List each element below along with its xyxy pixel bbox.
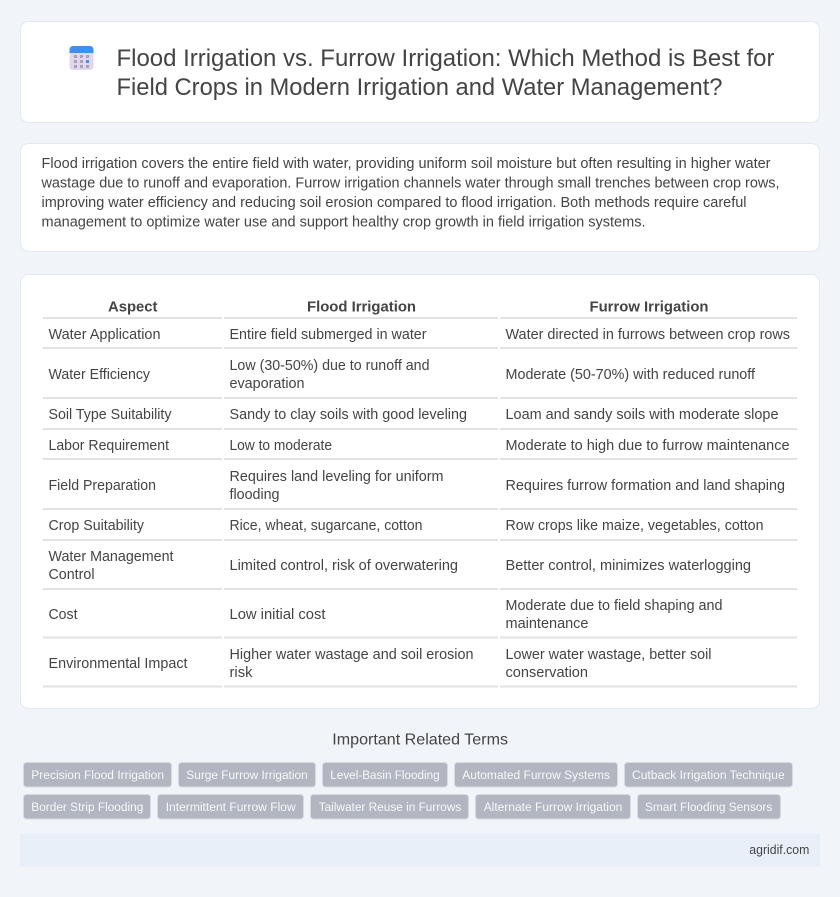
row: environmental impact: conservation [506,665,588,681]
table header row: Furrow Irrigation [590,298,708,316]
row: field preparation: Requires furrow formation and land shaping [506,478,785,494]
panel: title header [20,22,820,122]
related terms tags [24,762,792,819]
intro text block: Flood irrigation covers the entire field with water, providing uniform soil moisture but often resulting in higher water [42,156,771,172]
row: water management control: Water Management [48,549,174,565]
row: water efficiency: evaporation [230,376,304,392]
row: water management control: Better control, minimizes waterlogging [506,558,751,574]
related terms tags: Smart Flooding Sensors [645,800,772,814]
row: cost [43,598,797,638]
row: soil type suitability: Soil Type Suitability [48,407,172,423]
related terms tags: Intermittent Furrow Flow [166,800,296,814]
row: water efficiency: Water Efficiency [48,367,151,383]
row: cost: Cost [48,607,78,623]
row: labor requirement: Moderate to high due to furrow maintenance [506,438,790,454]
related terms tags: Precision Flood Irrigation [31,768,164,782]
title [116,45,774,101]
row: cost: maintenance [506,616,588,632]
row: water management control [43,549,797,590]
related terms tags: Cutback Irrigation Technique [632,768,785,782]
row: cost: Moderate due to field shaping and [506,598,722,614]
row: labor requirement: Low to moderate [230,438,332,454]
title: Flood Irrigation vs. Furrow Irrigation: Which Method is Best for [116,45,774,72]
icon: calendar grid [70,46,94,70]
row: crop suitability: Row crops like maize, vegetables, cotton [506,518,764,534]
related terms tags: Automated Furrow Systems [462,768,610,782]
intro text block: improving water efficiency and reducing soil erosion compared to flood irrigation. Both methods require careful [42,195,746,211]
intro text block: wastage due to runoff and evaporation. Furrow irrigation channels water through small trenches between crop rows, [40,176,779,192]
related terms tags: Alternate Furrow Irrigation [484,800,622,814]
row: crop suitability [43,518,797,541]
panel: comparison table [20,274,820,708]
row: water application: Water Application [48,327,160,343]
row: water management control: Control [48,567,94,583]
row: environmental impact: Higher water wastage and soil erosion [230,647,474,663]
row: water application: Water directed in furrows between crop rows [506,327,790,343]
row: field preparation: Requires land leveling for uniform [230,469,444,485]
footer bar [20,833,820,867]
related terms tags: Level-Basin Flooding [330,768,440,782]
row: field preparation: Field Preparation [48,478,156,494]
table header row: Flood Irrigation [307,298,416,316]
row: environmental impact [43,647,797,688]
footer bar: agridif.com [749,842,809,857]
row: crop suitability: Crop Suitability [48,518,145,534]
related terms tags: Surge Furrow Irrigation [186,768,308,782]
row: field preparation [43,469,797,510]
table header row: Aspect [108,298,158,316]
panel: introduction [20,144,820,252]
heading: related terms: Important Related Terms [332,732,508,748]
row: field preparation: flooding [230,487,280,503]
row: labor requirement [43,438,797,460]
row: water efficiency [43,358,797,399]
related terms tags: Tailwater Reuse in Furrows [319,800,461,814]
table header row [43,298,797,319]
row: water application: Entire field submerged in water [230,327,427,343]
row: water efficiency: Moderate (50-70%) with reduced runoff [506,367,756,383]
row: labor requirement: Labor Requirement [48,438,169,454]
row: water management control: Limited control, risk of overwatering [230,558,458,574]
intro text block: management to optimize water use and support healthy crop growth in field irrigation systems. [42,214,646,230]
related terms tags: Border Strip Flooding [31,800,143,814]
row: soil type suitability [43,407,797,430]
row: environmental impact: Lower water wastage, better soil [506,647,712,663]
row: water efficiency: Low (30-50%) due to runoff and [230,358,430,374]
row: water application [43,327,797,349]
row: soil type suitability: Sandy to clay soils with good leveling [230,407,467,423]
title: Field Crops in Modern Irrigation and Water Management? [116,74,722,101]
row: environmental impact: risk [230,665,253,681]
intro text block [40,156,779,230]
row: soil type suitability: Loam and sandy soils with moderate slope [506,407,778,423]
row: cost: Low initial cost [230,607,326,623]
row: crop suitability: Rice, wheat, sugarcane, cotton [230,518,422,534]
row: environmental impact: Environmental Impact [48,656,188,672]
